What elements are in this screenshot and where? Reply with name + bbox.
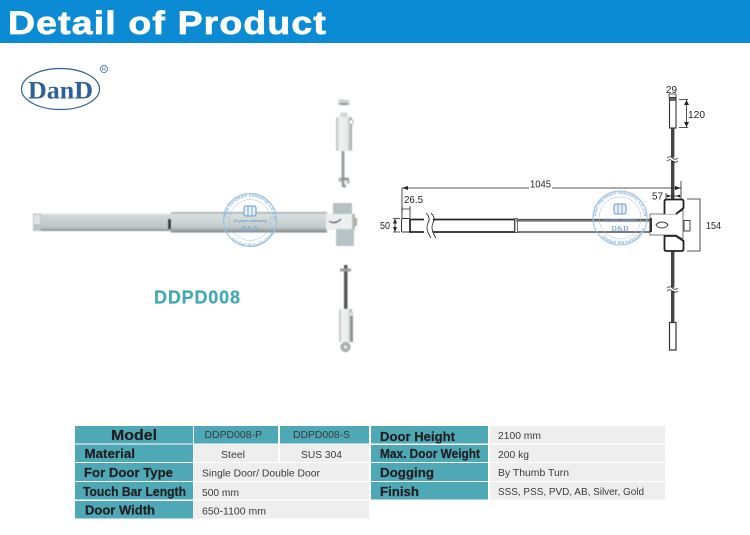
dimension: 26.5: [402, 194, 423, 218]
watermark stamp on photo: [223, 193, 277, 247]
product photo: bottom lock: [339, 265, 353, 352]
dimension: 57: [652, 190, 681, 202]
dimension: 1045: [402, 178, 681, 218]
row: Dogging: [371, 463, 665, 481]
row: Door Width: [75, 501, 369, 518]
dimension: 154: [687, 199, 721, 251]
title: Detail of Product: [8, 5, 327, 41]
watermark stamp on drawing: Global Manufacturer: [602, 228, 644, 244]
specification table: left: [75, 426, 369, 518]
row: Max. Door Weight: Max. Door Weight: [380, 446, 481, 461]
technical drawing: [380, 84, 721, 350]
row: Finish: [371, 482, 665, 500]
row: Door Height: 2100 mm: [498, 430, 541, 442]
row: Touch Bar Length: [75, 482, 369, 500]
watermark stamp on drawing: [592, 190, 648, 246]
bottom rod end: [670, 322, 676, 350]
row: Material: Material: [84, 446, 135, 461]
row: Material: SUS 304: [301, 449, 342, 461]
row: Model: Model: [111, 427, 157, 444]
row: Door Width: 650-1100 mm: [202, 506, 266, 518]
row: Door Width: Door Width: [85, 503, 155, 518]
row: Touch Bar Length: Touch Bar Length: [83, 484, 186, 499]
dimension: 50: 50: [380, 220, 390, 232]
watermark stamp on drawing: D&D: [611, 224, 629, 233]
row: Finish: SSS, PSS, PVD, AB, Silver, Gold: [498, 486, 644, 498]
product photo: touch bar: [33, 203, 357, 246]
row: Dogging: Dogging: [380, 465, 434, 480]
dimension: 1045: 1045: [530, 178, 551, 190]
row: Model: [75, 426, 369, 444]
watermark stamp on photo: D&D Hardware Industrial Co.,Ltd: [224, 194, 277, 220]
model name: DDPD008: [154, 288, 240, 308]
watermark stamp on photo: Global Manufacturer: [232, 231, 274, 247]
dimension: 120: 120: [688, 109, 705, 121]
row: For Door Type: For Door Type: [84, 465, 173, 480]
dimension: 26.5: 26.5: [404, 194, 423, 206]
header banner: [0, 0, 750, 43]
watermark stamp on drawing: D&D Hardware Industrial Co.,Ltd: [593, 190, 648, 216]
row: Touch Bar Length: 500 mm: [202, 487, 239, 499]
row: Finish: Finish: [380, 484, 419, 499]
row: Door Height: Door Height: [380, 429, 456, 444]
watermark stamp on drawing: 15 years warranty: [603, 217, 638, 222]
product photo: top lock: [336, 99, 353, 186]
row: Max. Door Weight: 200 kg: [498, 449, 529, 461]
logo: DanD: DanD: [28, 78, 93, 104]
horizontal bar: [402, 213, 650, 238]
dimension: 29: 29: [666, 84, 677, 96]
row: Model: DDPD008-P: [204, 429, 262, 441]
row: For Door Type: [75, 463, 369, 481]
specification table: right: [371, 426, 665, 500]
row: Max. Door Weight: [371, 445, 665, 462]
dimension: 57: 57: [652, 190, 663, 202]
dimension: 120: [679, 100, 705, 128]
logo: DanD: [22, 65, 108, 110]
top rod end: [670, 98, 676, 128]
vertical rods: [667, 128, 678, 322]
row: Door Height: [371, 426, 665, 444]
row: Model: DDPD008-S: [293, 429, 350, 441]
lock head: [650, 200, 690, 251]
row: Material: [75, 444, 369, 462]
dimension: 50: [380, 218, 400, 232]
dimension: 154: 154: [706, 220, 721, 232]
row: Material: Steel: [221, 449, 245, 461]
watermark stamp on photo: 15 years warranty: [233, 218, 268, 223]
watermark stamp on photo: D&D: [241, 224, 259, 233]
row: Dogging: By Thumb Turn: [498, 467, 569, 479]
row: For Door Type: Single Door/ Double Door: [202, 468, 320, 480]
logo: DanD: R: [102, 67, 106, 73]
